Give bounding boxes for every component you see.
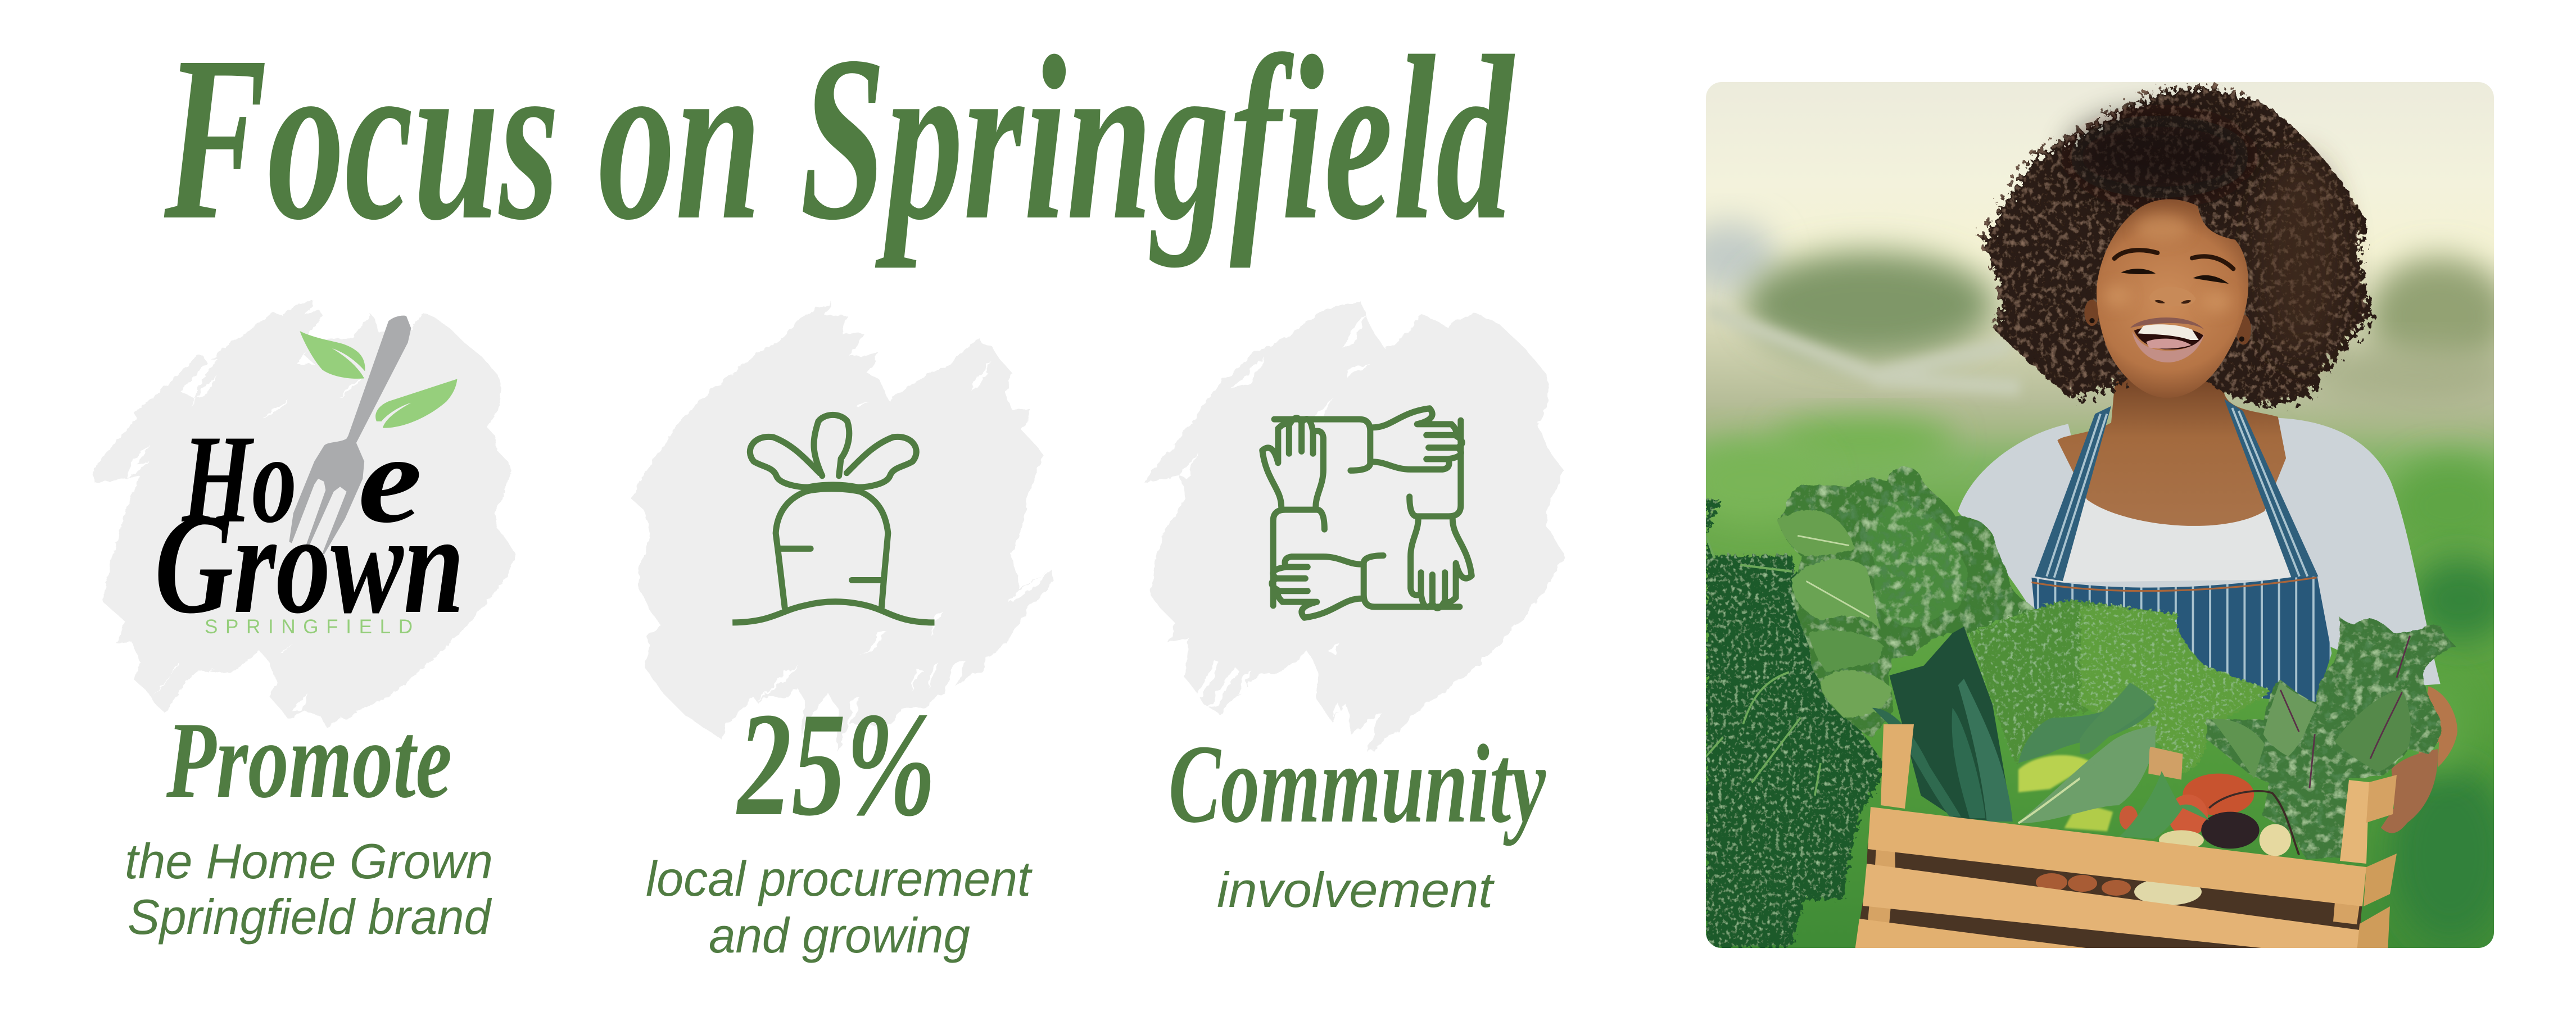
brush swatch: carrot xyxy=(631,301,1054,752)
hand: bottom xyxy=(1272,556,1460,618)
icon: lower leaf xyxy=(375,379,457,428)
text block: local procurement and growing xyxy=(646,851,1033,963)
icon: carrot xyxy=(732,415,935,623)
logo word: Springfield: SPRINGFIELD xyxy=(205,616,413,638)
hand: right xyxy=(1410,420,1472,608)
logo word: Home: Ho xyxy=(182,409,297,549)
crate back panel xyxy=(2148,746,2183,780)
crate slats xyxy=(1868,807,2366,906)
vegetables: centre carrot tops xyxy=(1970,600,2156,763)
vegetables: left bunch xyxy=(1706,467,2036,947)
brows xyxy=(2115,250,2233,269)
vegetables: leeks xyxy=(1872,627,2013,822)
icon: fork xyxy=(289,316,411,555)
cabbage leaves: right xyxy=(2080,683,2156,754)
mouth xyxy=(2130,317,2204,362)
photo background: sky and field xyxy=(1681,79,2515,951)
hair xyxy=(1982,87,2372,406)
text block: the Home Grown Springfield brand: the Home Grown xyxy=(125,833,493,889)
eyes xyxy=(2121,269,2229,284)
cheek and forehead highlights xyxy=(2104,215,2231,313)
logo word: Home xyxy=(182,409,422,549)
icon: upper leaf xyxy=(300,331,365,379)
icon: four interlocking hands xyxy=(1262,409,1472,618)
shirt front xyxy=(2057,497,2297,582)
heading: 25%: 25% xyxy=(736,682,936,847)
chard xyxy=(1777,467,2036,737)
face shape xyxy=(2097,199,2248,398)
brush swatch: community xyxy=(1144,301,1564,753)
brush swatch: Home Grown logo xyxy=(93,301,516,728)
panel: brush backgrounds xyxy=(93,301,1564,753)
photo: smiling farmer holding a crate of vegetables xyxy=(1681,79,2515,958)
text block: local procurement and growing: and growing xyxy=(709,908,970,963)
hand: left xyxy=(1262,418,1324,606)
carrot tops: left xyxy=(1706,500,1884,947)
hand: top xyxy=(1274,409,1462,470)
heading: Promote: Promote xyxy=(166,700,452,821)
arm and hand xyxy=(2381,686,2457,833)
crate interior xyxy=(1855,843,2362,955)
text block: local procurement and growing: local procurement xyxy=(646,851,1033,906)
title: Focus on Springfield xyxy=(162,7,1515,269)
text block: the Home Grown Springfield brand xyxy=(125,833,493,945)
woman: face xyxy=(2084,199,2251,398)
vegetables: right side xyxy=(2080,616,2457,860)
woman: body and hair xyxy=(1958,87,2441,704)
text block: involvement: involvement xyxy=(1217,862,1495,918)
crate posts xyxy=(1881,724,1914,809)
logo word: Grown: Grown xyxy=(155,485,464,643)
wooden crate xyxy=(1855,724,2397,958)
shirt xyxy=(1958,418,2441,686)
apron xyxy=(2031,574,2331,704)
neck and chest xyxy=(2057,364,2286,529)
beet greens xyxy=(2207,616,2455,860)
logo: Home Grown Springfield xyxy=(155,316,464,643)
heading: Community: Community xyxy=(1169,722,1546,846)
ears and earrings xyxy=(2084,300,2251,344)
logo word: Home: e xyxy=(358,409,422,549)
tomatoes and root vegetables xyxy=(2119,774,2299,856)
nose xyxy=(2149,287,2196,306)
text block: the Home Grown Springfield brand: Springfield brand xyxy=(128,889,492,945)
vegetables: cabbage and romanesco xyxy=(2017,688,2156,831)
green leaf over tomatoes xyxy=(2119,771,2209,839)
